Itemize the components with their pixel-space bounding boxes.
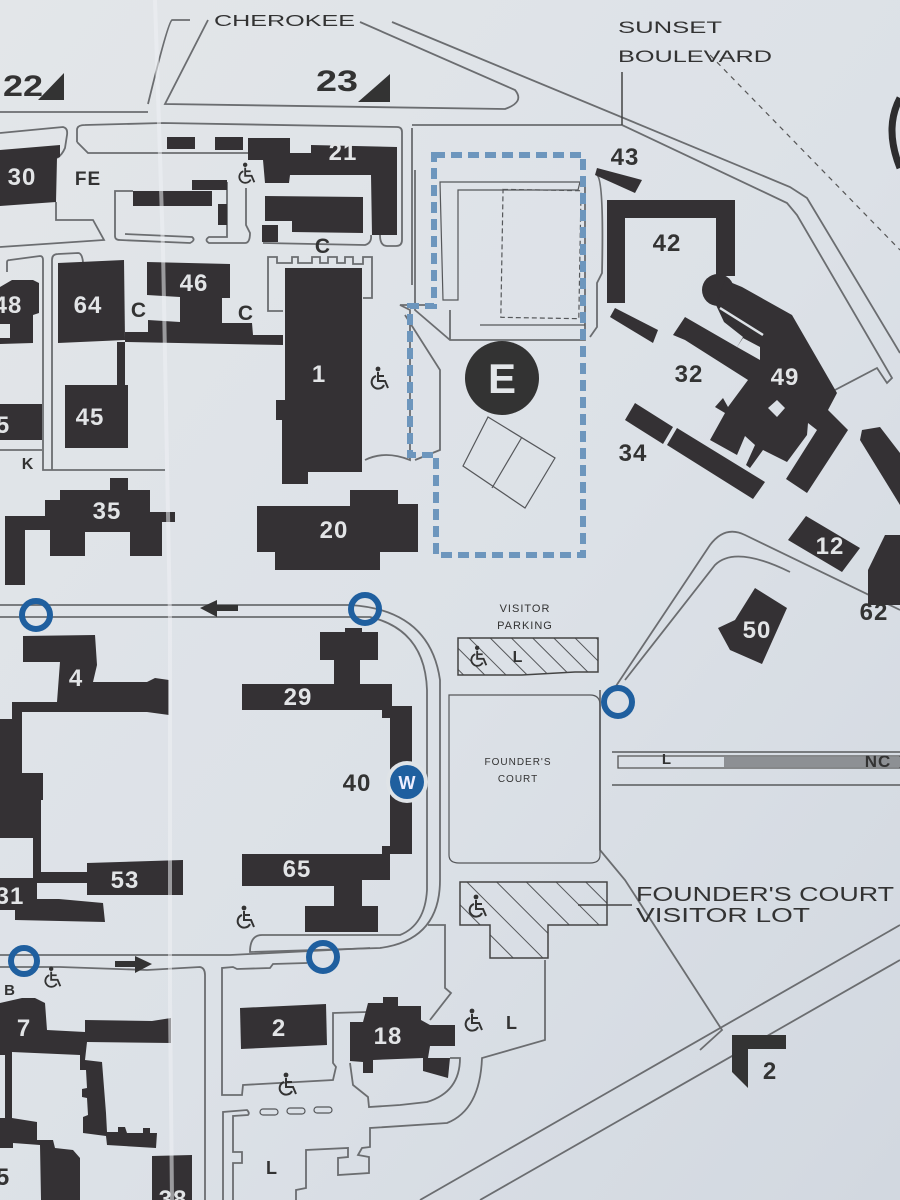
building numbers: 4 (69, 665, 83, 692)
lot numbers 22 and 23: 23 (316, 65, 358, 98)
building 38 (152, 1155, 192, 1200)
road labels: SUNSET (618, 18, 722, 37)
building numbers: 7 (17, 1015, 31, 1042)
labels outside buildings: 43 (611, 144, 639, 171)
building numbers: 18 (374, 1023, 402, 1050)
building numbers: 50 (743, 617, 771, 644)
building 34 (625, 403, 765, 499)
building numbers: 12 (816, 533, 844, 560)
labels outside buildings: L (513, 649, 523, 666)
parking and field outlines (260, 182, 600, 1115)
accessibility icons (45, 163, 486, 1095)
east building (860, 427, 900, 505)
labels outside buildings: L (506, 1013, 518, 1033)
visitor parking label: PARKING (497, 620, 553, 632)
building 35 (5, 478, 175, 585)
courtyard of 49 (737, 338, 760, 360)
building 50 (718, 588, 787, 664)
NC strip shading (724, 757, 900, 767)
building 4, 53 and 31 (0, 635, 183, 922)
founder's court visitor lot label: FOUNDER'S COURT (636, 884, 894, 906)
founder's court label: FOUNDER'S (484, 757, 552, 768)
building numbers: 64 (74, 292, 102, 319)
sunset boulevard pointer (621, 72, 623, 125)
building 2 (240, 1004, 327, 1049)
building 12 (788, 516, 860, 572)
L / NC strip (618, 756, 900, 768)
W marker: W (398, 773, 416, 793)
building 49 (673, 280, 848, 493)
building numbers: 65 (283, 856, 311, 883)
building 18 (350, 997, 455, 1078)
westbound arrow (200, 600, 238, 617)
road labels: BOULEVARD (618, 47, 772, 66)
building 42 (607, 200, 735, 303)
building 64 (58, 260, 125, 343)
W marker (386, 761, 428, 803)
building 45 (65, 385, 128, 448)
founder's court visitor lot label (578, 884, 894, 927)
building numbers: 21 (329, 139, 357, 166)
building numbers: 29 (284, 684, 312, 711)
building 29 and 40 (242, 628, 412, 854)
small buildings near FE (133, 137, 243, 225)
eastbound arrow (115, 956, 152, 973)
building numbers: 49 (771, 364, 799, 391)
labels outside buildings: L (266, 1158, 278, 1178)
building numbers: 30 (8, 164, 36, 191)
building 21 (248, 138, 397, 242)
labels outside buildings: 62 (860, 599, 888, 626)
zone E badge: E (488, 355, 516, 402)
building 5 (0, 404, 42, 440)
road labels: CHEROKEE (214, 13, 355, 30)
campus seal edge (892, 98, 900, 168)
building 1 (276, 268, 362, 484)
road labels (214, 13, 772, 66)
paper fold (155, 0, 172, 1200)
building 7 (0, 998, 171, 1200)
dotted boundary (710, 55, 900, 250)
visitor parking label (497, 603, 553, 632)
route 2 marker (732, 1035, 786, 1088)
transit stops (11, 595, 632, 974)
building numbers: 46 (180, 270, 208, 297)
labels outside buildings: 40 (343, 770, 371, 797)
labels outside buildings: 2 (763, 1058, 777, 1085)
founder's court label: COURT (498, 774, 538, 785)
labels outside buildings: 32 (675, 361, 703, 388)
building numbers: 20 (320, 517, 348, 544)
labels outside buildings: 42 (653, 230, 681, 257)
building 46 and corridor (117, 262, 283, 395)
annex of 42 (610, 308, 658, 343)
building 48 (0, 280, 39, 344)
labels outside buildings: C (131, 299, 147, 322)
labels outside buildings: L (662, 751, 672, 768)
visitor parking hatch (458, 638, 598, 675)
building 43 (595, 168, 642, 193)
labels outside buildings: NC (865, 752, 891, 771)
E zone dashed boundary (410, 155, 583, 555)
lot numbers 22 and 23 (3, 65, 390, 103)
building numbers: 1 (312, 361, 326, 388)
labels outside buildings: K (22, 456, 34, 473)
building 20 (257, 490, 418, 570)
lot numbers 22 and 23: 22 (3, 70, 43, 103)
visitor parking label: VISITOR (500, 603, 550, 615)
building by 62 (868, 535, 900, 605)
building numbers: 35 (93, 498, 121, 525)
building numbers: 45 (76, 404, 104, 431)
labels outside buildings: FE (75, 169, 101, 190)
zone E badge (465, 341, 539, 415)
labels outside buildings: B (4, 982, 16, 999)
founder's court visitor lot label: VISITOR LOT (636, 905, 810, 927)
building numbers: 2 (272, 1015, 286, 1042)
founder's court visitor lot hatch (460, 882, 607, 958)
building 65 (242, 854, 390, 932)
founder's court label (484, 757, 552, 785)
building numbers: 53 (111, 867, 139, 894)
labels outside buildings: C (238, 302, 254, 325)
building 30 (0, 145, 60, 206)
labels outside buildings: C (315, 235, 331, 258)
labels outside buildings: 34 (619, 440, 647, 467)
